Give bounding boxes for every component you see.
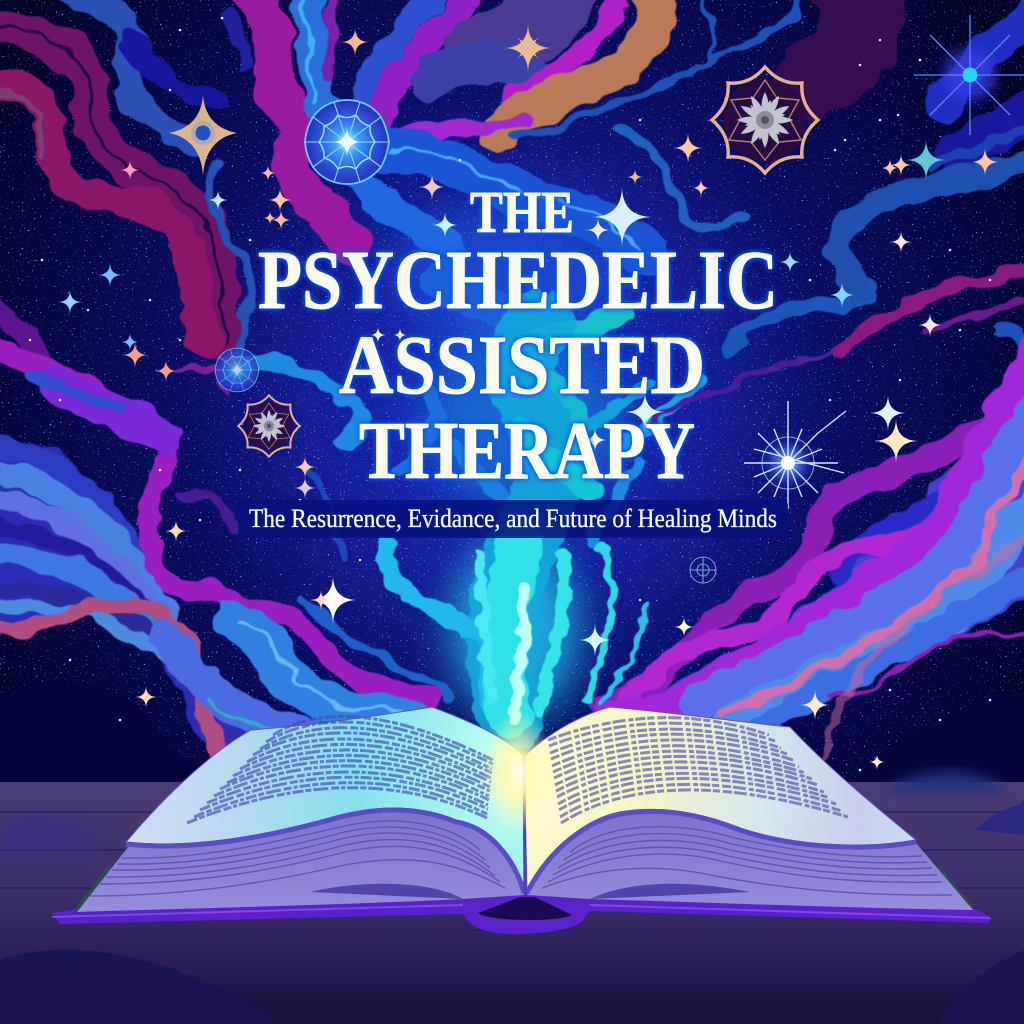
band: upper left crimson	[0, 25, 225, 360]
left page block	[77, 810, 524, 912]
icon: small gold star	[504, 24, 552, 72]
page rims	[126, 810, 916, 893]
icon: gold octagon mandala	[712, 67, 818, 173]
band: right side strands	[600, 330, 1024, 755]
soft blue glow behind title	[390, 200, 630, 720]
band: dark maroon top right	[815, 0, 864, 80]
central glow	[482, 710, 554, 834]
icon: cyan star top right	[914, 15, 1024, 135]
icon: gold four-point star	[169, 96, 237, 175]
subtitle bar: The Resurrence, Evidance, and Future of Healing Minds	[249, 504, 777, 533]
subtitle bar	[238, 500, 788, 538]
left page	[126, 707, 524, 893]
right page text lines	[548, 718, 848, 823]
starfield	[0, 0, 1024, 790]
icon: blue web mandala	[305, 100, 389, 184]
band: top left blue	[60, 0, 251, 350]
book cover	[52, 866, 992, 934]
icon: blue starburst	[744, 401, 846, 509]
band: left fan	[0, 440, 310, 772]
title: PSYCHEDELIC	[258, 234, 778, 327]
night sky background	[0, 0, 1024, 800]
band: top centre violet and orange	[360, 0, 797, 140]
band: top magenta river	[225, 0, 350, 245]
band: left base wash	[0, 428, 300, 752]
open glowing book	[52, 707, 992, 934]
spine gutter	[524, 757, 525, 893]
band: upper right blue and crimson	[837, 10, 1024, 370]
central teal energy column	[386, 325, 650, 715]
distant dark hills	[0, 683, 1024, 790]
title: ASSISTED	[339, 319, 705, 412]
right page block	[527, 811, 973, 910]
icon: small blue web mandala	[215, 348, 259, 392]
left page text lines	[187, 716, 493, 823]
flowing psychedelic bands	[0, 0, 1024, 772]
title: THERAPY	[359, 405, 695, 496]
wooden floor	[0, 772, 1024, 1024]
band: left violet ribbon	[0, 345, 452, 722]
band: right base wash	[620, 345, 1024, 732]
sparkles	[58, 28, 999, 770]
bright star dots	[30, 18, 990, 770]
right page	[524, 707, 916, 893]
icon: faint web mandala	[690, 557, 716, 583]
title	[258, 179, 778, 496]
band: blue swirls around title	[250, 130, 870, 560]
icon: small gold mandala	[238, 395, 300, 457]
title: THE	[470, 179, 574, 245]
